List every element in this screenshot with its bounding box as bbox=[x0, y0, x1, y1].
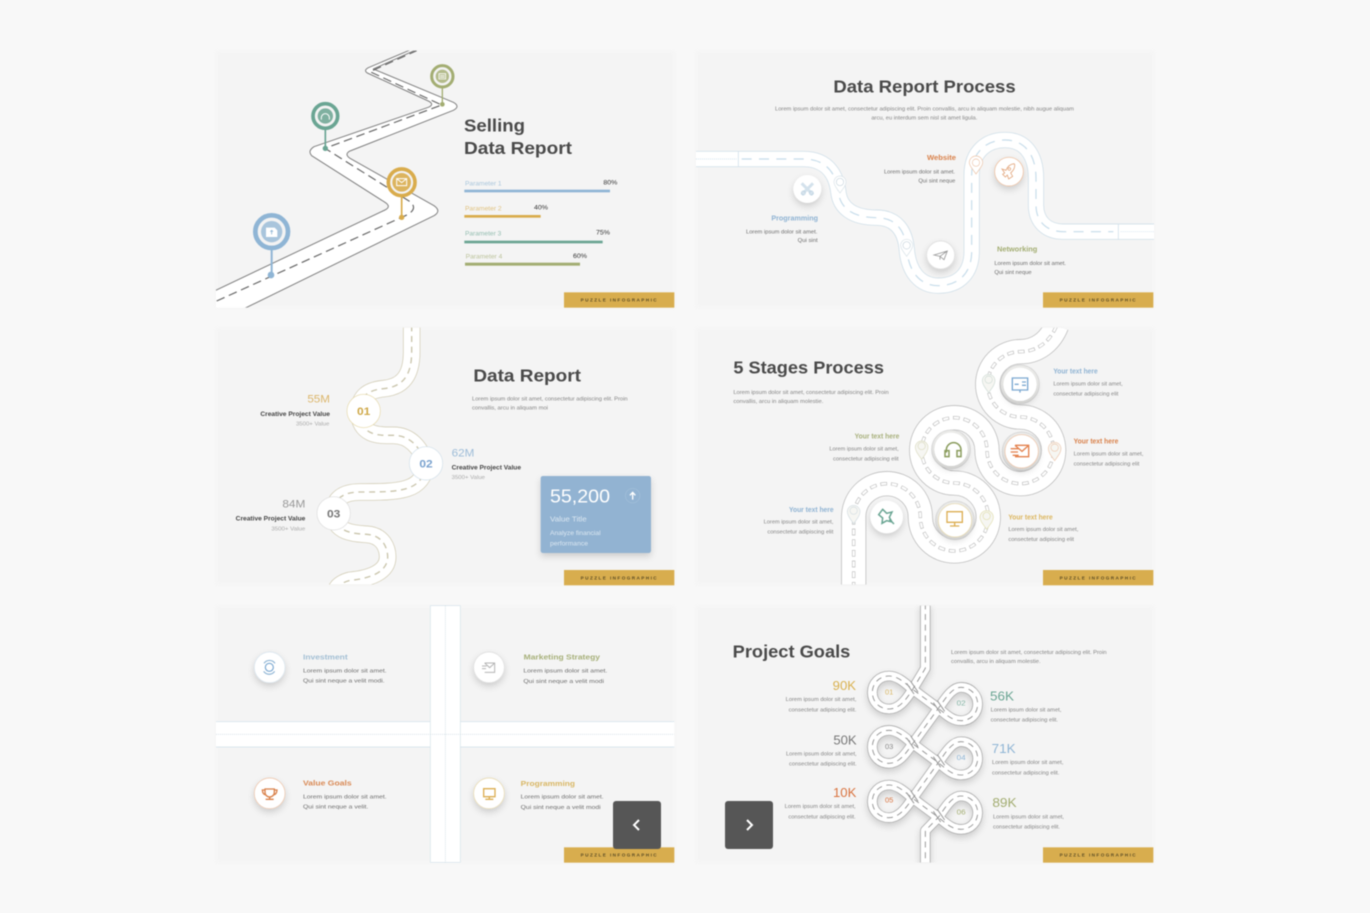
tag: puzzle infographic bbox=[1043, 570, 1153, 585]
stage text: olive: Lorem ipsum dolor sit amet, bbox=[829, 447, 899, 453]
vertical winding road bbox=[333, 325, 426, 589]
panel: project goals bbox=[696, 603, 1154, 867]
heading: Selling bbox=[464, 115, 525, 135]
progress bars: Parameter 2 bbox=[465, 205, 502, 212]
progress bars: 80% bbox=[603, 179, 618, 186]
stage text: olive bbox=[829, 434, 899, 463]
progress bars: Parameter 1 bbox=[465, 180, 502, 187]
goal 90K: consectetur adipiscing elit. bbox=[789, 707, 857, 713]
stage text: blue top: Your text here bbox=[1053, 369, 1098, 376]
stage text: blue bottom: consectetur adipiscing elit bbox=[767, 529, 834, 535]
value 62M: Creative Project Value bbox=[452, 464, 521, 471]
step: programming: Qui sint bbox=[798, 238, 818, 244]
map pin: olive bbox=[432, 66, 453, 107]
step: networking: Qui sint neque bbox=[994, 270, 1032, 276]
stat card: performance bbox=[550, 541, 588, 548]
icon: investment bbox=[254, 652, 285, 683]
loop numbers: 05 bbox=[885, 795, 893, 804]
text: value goals: Qui sint neque a velit. bbox=[303, 805, 369, 811]
next button bbox=[725, 801, 773, 849]
goal 71K: Lorem ipsum dolor sit amet, bbox=[992, 760, 1064, 766]
text: investment: Lorem ipsum dolor sit amet. bbox=[303, 668, 387, 674]
stage text: blue top: Lorem ipsum dolor sit amet, bbox=[1053, 381, 1123, 387]
text: marketing strategy: Qui sint neque a velit modi bbox=[523, 679, 604, 685]
stage text: olive: Your text here bbox=[855, 434, 899, 441]
stage text: gold bbox=[1008, 514, 1079, 543]
curved road bbox=[693, 140, 1157, 286]
step: website: Website bbox=[927, 155, 956, 162]
goal 50K: 50K bbox=[833, 732, 857, 747]
text: investment: Qui sint neque a velit modi. bbox=[303, 679, 385, 685]
value 55M bbox=[260, 394, 330, 428]
tag: puzzle infographic bbox=[1043, 292, 1153, 308]
stat card: Analyze financial bbox=[550, 530, 601, 537]
stage text: gold: Your text here bbox=[1008, 514, 1053, 521]
winding road bbox=[216, 50, 458, 308]
intro text: Lorem ipsum dolor sit amet, consectetur adipiscing elit. Proin bbox=[951, 650, 1107, 656]
intro text: convallis, arcu in aliquam molestie. bbox=[733, 399, 824, 405]
tag: puzzle infographic: PUZZLE INFOGRAPHIC bbox=[1060, 853, 1136, 858]
progress bars bbox=[464, 179, 618, 266]
step: programming: Programming bbox=[771, 215, 818, 222]
intro text: Lorem ipsum dolor sit amet, consectetur adipiscing elit. Proin bbox=[733, 390, 889, 396]
value 84M bbox=[236, 499, 306, 532]
crossroad bbox=[216, 606, 674, 862]
goal 50K: Lorem ipsum dolor sit amet, bbox=[786, 751, 857, 757]
map pin: blue bbox=[255, 215, 288, 278]
tag: puzzle infographic bbox=[564, 292, 674, 308]
goal 50K: consectetur adipiscing elit. bbox=[789, 762, 857, 768]
map pin: gold bbox=[388, 169, 415, 220]
goal 10K bbox=[785, 785, 856, 820]
panel: crossroads bbox=[216, 606, 675, 863]
text: programming: Programming bbox=[521, 779, 575, 788]
figure-eight road bbox=[872, 603, 978, 867]
pins bbox=[834, 156, 983, 256]
text: programming bbox=[521, 779, 604, 811]
goal 50K bbox=[786, 732, 857, 768]
stat card: 55,200 bbox=[550, 485, 610, 506]
goal 56K: Lorem ipsum dolor sit amet, bbox=[991, 707, 1062, 713]
progress bars: Parameter 4 bbox=[466, 253, 503, 260]
heading: Data Report bbox=[464, 138, 572, 158]
loop numbers: 02 bbox=[957, 699, 966, 708]
loop numbers: 06 bbox=[957, 807, 966, 816]
stage text: gold: Lorem ipsum dolor sit amet, bbox=[1008, 527, 1079, 533]
icon: monitor bbox=[936, 501, 974, 540]
goal 89K: consectetur adipiscing elit. bbox=[993, 825, 1060, 831]
step: programming bbox=[746, 215, 818, 244]
goal 71K: consectetur adipiscing elit. bbox=[992, 770, 1060, 776]
tag: puzzle infographic: PUZZLE INFOGRAPHIC bbox=[581, 298, 657, 303]
intro text bbox=[472, 397, 628, 412]
stage text: orange: Your text here bbox=[1074, 438, 1118, 445]
value 55M: 55M bbox=[307, 394, 330, 406]
intro text: arcu, eu interdum sem nisl sit amet ligula. bbox=[871, 115, 978, 121]
tag: puzzle infographic bbox=[1043, 847, 1153, 863]
icon: trophy bbox=[254, 778, 285, 809]
value 62M: 3500+ Value bbox=[452, 475, 485, 481]
panel: data report bbox=[216, 325, 675, 589]
step: networking: Lorem ipsum dolor sit amet. bbox=[994, 261, 1066, 267]
text: marketing strategy: Marketing Strategy bbox=[524, 653, 601, 662]
stat card: Value Title bbox=[550, 515, 587, 524]
icon: programming bbox=[793, 175, 821, 203]
icon: headphones bbox=[932, 430, 970, 469]
panel: selling data report bbox=[216, 50, 676, 308]
heading: Data Report bbox=[473, 366, 581, 386]
text: investment bbox=[303, 652, 387, 685]
intro text: Lorem ipsum dolor sit amet, consectetur adipiscing elit. Proin bbox=[472, 397, 628, 403]
icon: presentation bbox=[1001, 365, 1039, 404]
step: website bbox=[884, 155, 956, 184]
loop numbers bbox=[885, 688, 966, 816]
stage text: blue bottom: Lorem ipsum dolor sit amet, bbox=[764, 519, 834, 525]
marker 01 bbox=[347, 394, 380, 428]
progress bars: Parameter 3 bbox=[465, 231, 502, 238]
marker 01: 01 bbox=[357, 406, 370, 418]
goal 10K: 10K bbox=[833, 785, 856, 800]
icon: mail bbox=[1002, 432, 1041, 471]
goal 71K bbox=[992, 741, 1064, 776]
marker 03: 03 bbox=[327, 508, 340, 520]
intro text bbox=[733, 390, 889, 405]
goal 89K: Lorem ipsum dolor sit amet, bbox=[993, 814, 1064, 820]
value 84M: Creative Project Value bbox=[236, 516, 306, 523]
stat card bbox=[541, 476, 651, 553]
text: marketing strategy: Lorem ipsum dolor sit amet. bbox=[523, 668, 608, 674]
step: website: Lorem ipsum dolor sit amet. bbox=[884, 169, 955, 175]
tag: puzzle infographic: PUZZLE INFOGRAPHIC bbox=[1060, 575, 1136, 580]
map pin: green bbox=[313, 104, 338, 151]
loop numbers: 04 bbox=[957, 753, 966, 762]
icon: mail bbox=[474, 652, 504, 683]
progress bars: 75% bbox=[596, 230, 610, 237]
value 84M: 84M bbox=[282, 499, 305, 511]
tag: puzzle infographic: PUZZLE INFOGRAPHIC bbox=[1060, 298, 1136, 303]
progress bars: 60% bbox=[573, 253, 587, 260]
tag: puzzle infographic: PUZZLE INFOGRAPHIC bbox=[581, 853, 657, 858]
stage text: orange: consectetur adipiscing elit bbox=[1074, 461, 1140, 467]
text: investment: Investment bbox=[303, 652, 348, 661]
panel: data report process bbox=[696, 80, 1154, 308]
progress bars: 40% bbox=[534, 204, 548, 211]
previous button bbox=[613, 801, 661, 849]
loop numbers: 01 bbox=[885, 688, 893, 697]
icon: rocket bbox=[995, 157, 1023, 186]
intro text: Lorem ipsum dolor sit amet, consectetur adipiscing elit. Proin convallis, arcu in aliquam molestie, nibh augue aliquam bbox=[775, 106, 1074, 112]
heading: Data Report Process bbox=[833, 77, 1016, 97]
goal 10K: Lorem ipsum dolor sit amet, bbox=[785, 804, 856, 810]
marker 03 bbox=[317, 497, 350, 530]
intro text bbox=[775, 106, 1074, 121]
text: programming: Lorem ipsum dolor sit amet. bbox=[521, 794, 604, 800]
value 84M: 3500+ Value bbox=[271, 526, 305, 532]
stage text: blue top bbox=[1053, 369, 1123, 398]
icon: paper plane bbox=[927, 241, 955, 269]
stage text: blue bottom: Your text here bbox=[789, 507, 834, 514]
stage text: olive: consectetur adipiscing elit bbox=[833, 457, 899, 463]
goal 90K: Lorem ipsum dolor sit amet, bbox=[786, 697, 857, 703]
marker 02: 02 bbox=[419, 458, 433, 470]
text: value goals: Value Goals bbox=[303, 779, 352, 788]
stage text: orange: Lorem ipsum dolor sit amet, bbox=[1074, 451, 1144, 457]
step: networking: Networking bbox=[997, 247, 1037, 254]
step: programming: Lorem ipsum dolor sit amet. bbox=[746, 229, 818, 235]
goal 56K: consectetur adipiscing elit. bbox=[991, 718, 1058, 724]
goal 89K bbox=[992, 795, 1064, 831]
serpentine road bbox=[854, 325, 1057, 589]
value 62M bbox=[452, 447, 521, 481]
goal 56K: 56K bbox=[990, 688, 1014, 703]
text: programming: Qui sint neque a velit modi bbox=[521, 805, 601, 811]
step: networking bbox=[994, 247, 1066, 276]
intro text: convallis, arcu in aliquam moi bbox=[472, 406, 548, 412]
stage text: orange bbox=[1074, 438, 1144, 467]
value 55M: Creative Project Value bbox=[260, 411, 330, 418]
goal 56K bbox=[990, 688, 1062, 724]
stage text: gold: consectetur adipiscing elit bbox=[1008, 537, 1074, 543]
stage text: blue bottom bbox=[764, 507, 834, 535]
text: value goals bbox=[303, 779, 387, 811]
value 62M: 62M bbox=[452, 447, 474, 459]
loop numbers: 03 bbox=[885, 742, 893, 751]
intro text: convallis, arcu in aliquam molestie. bbox=[951, 659, 1041, 665]
stage text: blue top: consectetur adipiscing elit bbox=[1053, 392, 1119, 398]
goal 89K: 89K bbox=[992, 795, 1017, 810]
marker 02 bbox=[409, 447, 443, 480]
panel: 5 stages process bbox=[696, 325, 1154, 589]
icon: star search bbox=[870, 501, 903, 533]
goal 90K bbox=[786, 678, 857, 713]
pins bbox=[847, 374, 1061, 529]
goal 90K: 90K bbox=[833, 678, 856, 693]
intro text bbox=[951, 650, 1107, 665]
icon: monitor bbox=[474, 778, 504, 809]
step: website: Qui sint neque bbox=[918, 178, 955, 184]
goal 71K: 71K bbox=[992, 741, 1016, 756]
text: marketing strategy bbox=[523, 653, 608, 685]
goal 10K: consectetur adipiscing elit. bbox=[788, 814, 856, 820]
value 55M: 3500+ Value bbox=[296, 422, 329, 428]
tag: puzzle infographic bbox=[564, 847, 674, 863]
heading: Project Goals bbox=[733, 642, 850, 662]
tag: puzzle infographic: PUZZLE INFOGRAPHIC bbox=[581, 575, 657, 580]
heading: 5 Stages Process bbox=[733, 358, 884, 378]
text: value goals: Lorem ipsum dolor sit amet. bbox=[303, 794, 387, 800]
heading bbox=[464, 115, 572, 158]
tag: puzzle infographic bbox=[564, 570, 674, 585]
